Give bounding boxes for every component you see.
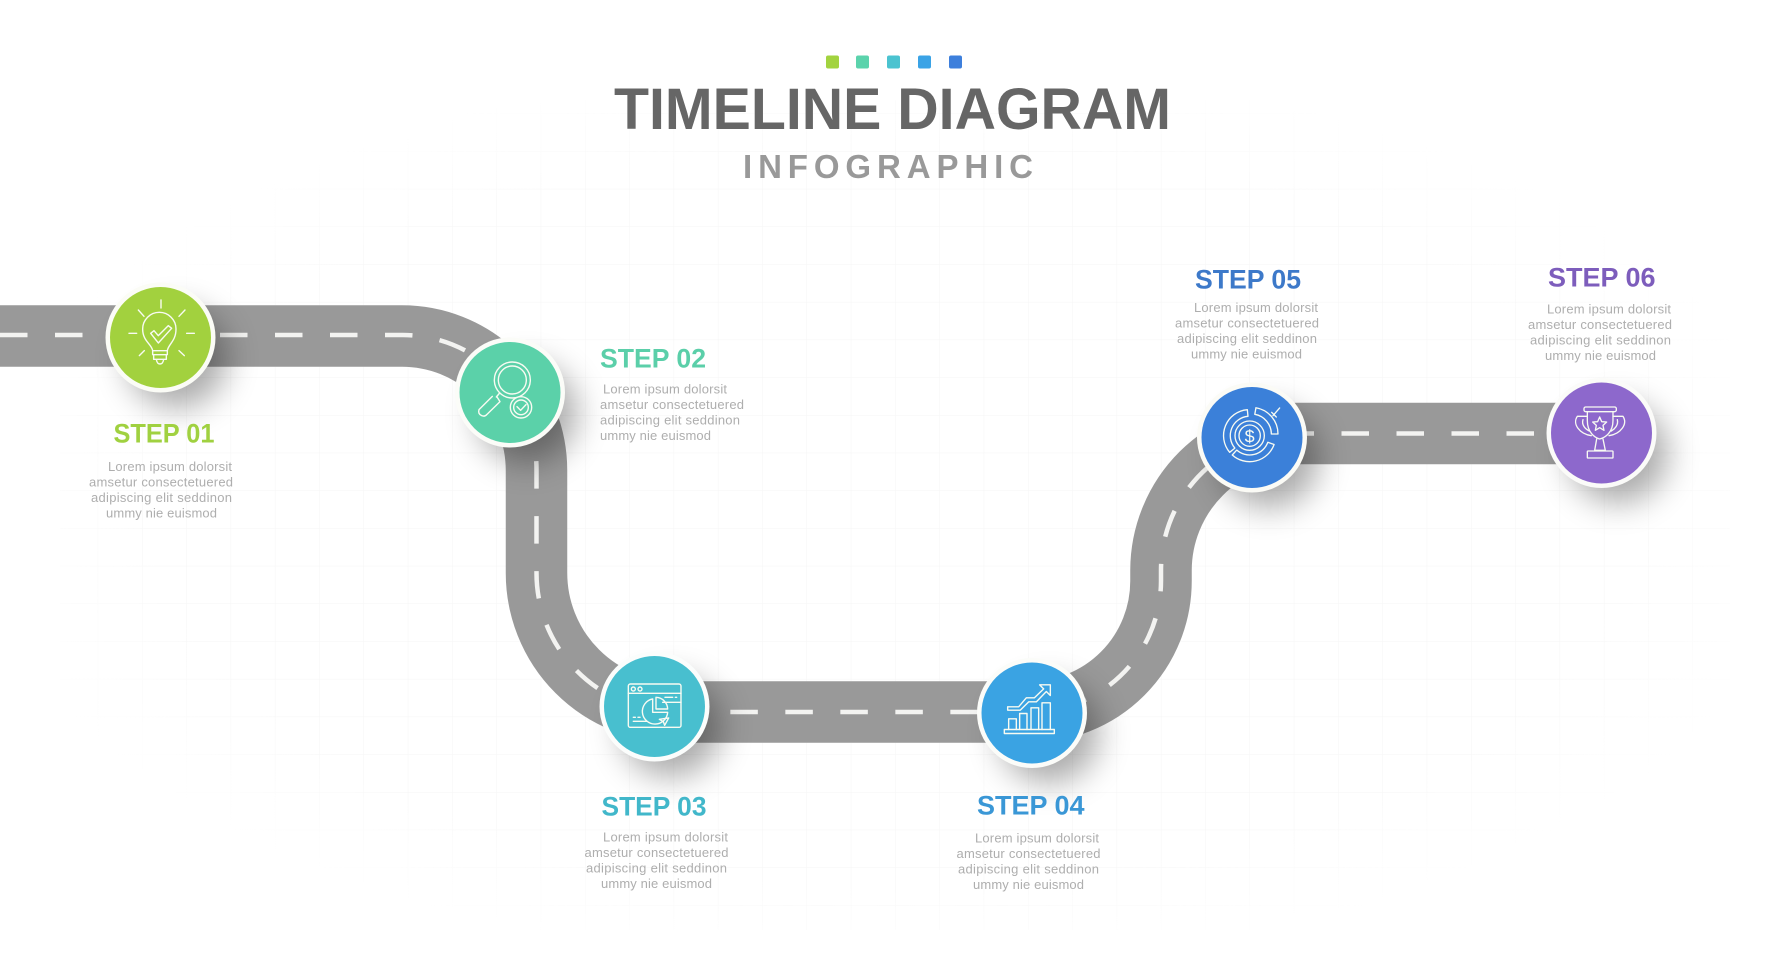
text: step 04 description: ummy nie euismod bbox=[973, 877, 1084, 892]
icon: dollar target: $ bbox=[1245, 426, 1255, 446]
heading: step 04: STEP 04 bbox=[977, 790, 1084, 820]
text: step 01 description: adipiscing elit seddinon bbox=[91, 490, 232, 505]
text: step 06 description bbox=[1528, 301, 1672, 363]
text: step 01 description: ummy nie euismod bbox=[106, 506, 217, 520]
text: step 06 description: Lorem ipsum dolorsit bbox=[1547, 301, 1671, 316]
text: step 02 description: amsetur consectetuered bbox=[600, 397, 744, 412]
icon: dollar target bbox=[1224, 408, 1280, 462]
text: step 05 description: ummy nie euismod bbox=[1191, 346, 1302, 361]
icon: light bulb bbox=[129, 300, 194, 364]
title block bbox=[614, 56, 1171, 185]
text: step 03 description: Lorem ipsum dolorsit bbox=[603, 830, 728, 845]
text: step 05 description: adipiscing elit seddinon bbox=[1177, 331, 1317, 346]
step 01 bbox=[89, 282, 233, 520]
icon: trophy bbox=[1576, 407, 1625, 458]
heading: step 05: STEP 05 bbox=[1195, 264, 1301, 294]
text: step 06 description: ummy nie euismod bbox=[1545, 348, 1656, 363]
icon: rising bar chart bbox=[1004, 685, 1054, 733]
node circle bbox=[1197, 382, 1307, 492]
text: step 03 description bbox=[584, 830, 728, 891]
text: step 04 description: adipiscing elit seddinon bbox=[958, 862, 1099, 876]
icon: browser window with pie chart bbox=[628, 684, 681, 727]
text: step 04 description: amsetur consectetuered bbox=[956, 846, 1100, 861]
step 02 bbox=[455, 338, 744, 463]
node circle bbox=[106, 282, 216, 392]
text: step 06 description: adipiscing elit seddinon bbox=[1530, 332, 1671, 348]
text: step 04 description bbox=[956, 831, 1100, 892]
text: step 01 description bbox=[89, 459, 233, 520]
node circle bbox=[977, 658, 1087, 768]
heading: TIMELINE DIAGRAM bbox=[614, 77, 1171, 142]
text: step 03 description: ummy nie euismod bbox=[601, 876, 712, 891]
text: step 05 description: Lorem ipsum dolorsit bbox=[1194, 300, 1318, 315]
text: step 02 description: Lorem ipsum dolorsit bbox=[603, 382, 727, 396]
heading: step 01: STEP 01 bbox=[114, 418, 214, 448]
text: step 04 description: Lorem ipsum dolorsit bbox=[975, 831, 1099, 846]
text: step 03 description: adipiscing elit seddinon bbox=[586, 860, 727, 876]
text: step 06 description: amsetur consectetuered bbox=[1528, 317, 1672, 332]
text: step 02 description: adipiscing elit seddinon bbox=[600, 412, 740, 428]
step 06 bbox=[1528, 262, 1672, 503]
heading: step 06: STEP 06 bbox=[1548, 262, 1656, 292]
text: step 03 description: amsetur consectetuered bbox=[584, 845, 728, 860]
text: step 05 description bbox=[1175, 300, 1319, 361]
text: step 01 description: amsetur consectetuered bbox=[89, 474, 233, 490]
heading: step 02: STEP 02 bbox=[600, 344, 706, 374]
road bbox=[0, 335, 1602, 712]
step 05 bbox=[1175, 264, 1319, 508]
text: step 05 description: amsetur consectetuered bbox=[1175, 315, 1319, 330]
subheading: INFOGRAPHIC bbox=[743, 148, 1033, 185]
icon: magnifier bbox=[479, 362, 532, 418]
step 04 bbox=[956, 658, 1100, 892]
text: step 02 description bbox=[600, 382, 744, 443]
step 03 bbox=[584, 652, 728, 891]
node circle bbox=[455, 338, 565, 448]
text: step 01 description: Lorem ipsum dolorsit bbox=[108, 459, 232, 474]
node circle bbox=[1546, 378, 1656, 488]
text: step 02 description: ummy nie euismod bbox=[600, 428, 711, 443]
node circle bbox=[600, 652, 710, 762]
heading: step 03: STEP 03 bbox=[602, 792, 706, 822]
colour squares bbox=[826, 56, 962, 68]
